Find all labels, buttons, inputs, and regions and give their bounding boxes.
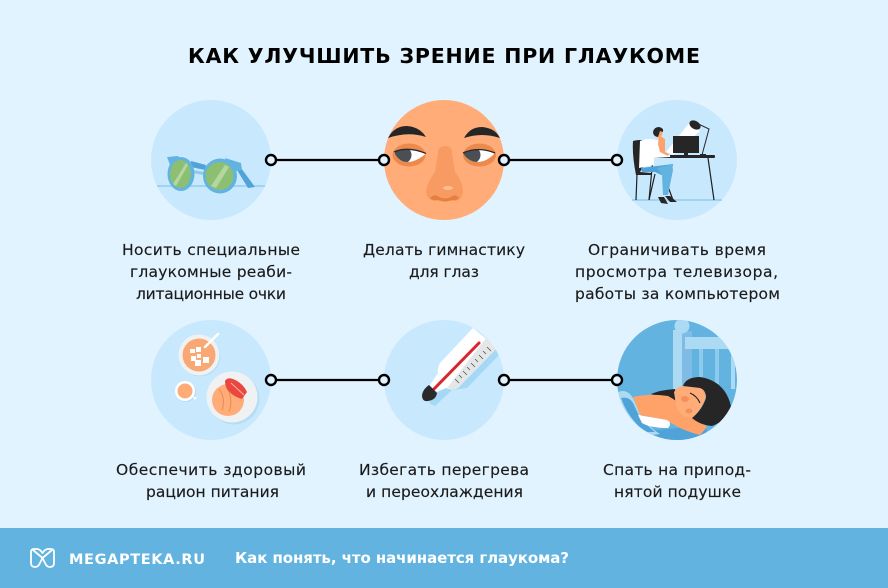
text: avoid overheating xyxy=(359,461,529,501)
text: eye exercises: Делать гимнастику xyxy=(363,241,525,259)
brand name: MEGAPTEKA.RU xyxy=(69,552,205,568)
connector: eyes to computer xyxy=(499,155,622,165)
text: avoid overheating: и переохлаждения xyxy=(366,483,523,501)
text: raised pillow: Спать на припод- xyxy=(603,461,751,479)
title: КАК УЛУЧШИТЬ ЗРЕНИЕ ПРИ ГЛАУКОМЕ xyxy=(188,44,700,68)
connector: thermometer to sleep xyxy=(499,375,622,385)
connector: food to thermometer xyxy=(266,375,389,385)
text: limit screen time: работы за компьютером xyxy=(575,285,780,303)
icon: logo xyxy=(31,549,54,567)
text: limit screen time: просмотра телевизора, xyxy=(575,263,778,281)
text: special glasses xyxy=(122,241,300,303)
text: eye exercises: для глаз xyxy=(409,263,479,281)
text: raised pillow: нятой подушке xyxy=(614,483,741,501)
text: special glasses: глаукомные реаби- xyxy=(130,263,292,281)
panel: food xyxy=(151,320,271,440)
text: healthy diet xyxy=(116,461,306,501)
text: special glasses: Носить специальные xyxy=(122,241,300,259)
text: limit screen time xyxy=(575,241,780,303)
text: avoid overheating: Избегать перегрева xyxy=(359,461,529,479)
footer link: Как понять, что начинается глаукома? xyxy=(235,549,569,567)
text: special glasses: литационные очки xyxy=(136,285,286,303)
panel: glasses xyxy=(151,100,271,220)
text: healthy diet: рацион питания xyxy=(146,483,279,501)
text: raised pillow xyxy=(603,461,751,501)
text: eye exercises xyxy=(363,241,525,281)
connector: glasses to eyes xyxy=(266,155,389,165)
footer bar xyxy=(0,528,888,588)
panel: sleeping woman xyxy=(617,318,740,442)
text: healthy diet: Обеспечить здоровый xyxy=(116,461,306,479)
text: limit screen time: Ограничивать время xyxy=(588,241,766,259)
panel: thermometer xyxy=(384,320,504,440)
panel: face eye exercise xyxy=(384,100,504,220)
panel: person at computer xyxy=(617,100,737,220)
